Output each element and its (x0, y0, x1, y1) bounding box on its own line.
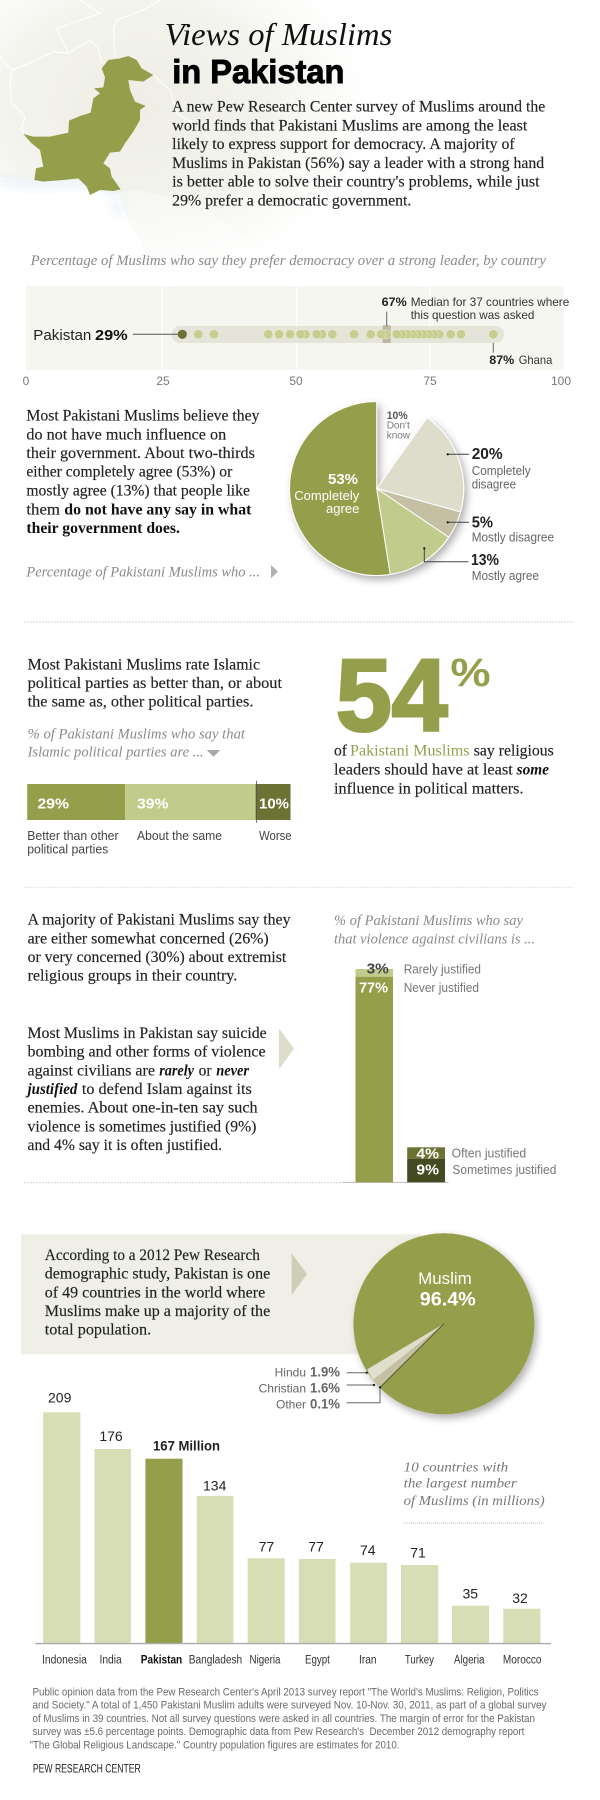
text: concern about extremist groups: or very concerned (30%) about extremist (28, 949, 287, 966)
bar chart: violence justified: 4% (416, 1146, 439, 1162)
footnote: survey was ±5.6 percentage points. Demographic data from Pew Research's December 2012 demography report (32, 1726, 524, 1738)
arrow: points to violence chart (279, 1028, 294, 1069)
bar chart: countries with largest Muslim population: India (100, 1654, 122, 1666)
text: influence on government: Most Pakistani Muslims believe they (26, 408, 260, 425)
bar chart: violence justified: Sometimes justified (452, 1163, 556, 1177)
text: religious leaders (334, 743, 554, 797)
pie chart: influence on government: know (387, 431, 411, 442)
panel: demographic study (21, 1234, 421, 1354)
pie chart: influence on government: 5% (472, 515, 493, 532)
bar chart: violence justified: Rarely justified (404, 962, 481, 976)
big statistic: 54%: % (450, 651, 491, 695)
chart caption with arrow: Percentage of Pakistani Muslims who ... (25, 565, 260, 581)
text: influence on government (26, 408, 260, 537)
bar chart: countries with largest Muslim population: 74 (360, 1542, 376, 1558)
footnote: Public opinion data from the Pew Research Center's April 2013 survey report "The World's Muslims: Religion, Politics (32, 1687, 539, 1699)
bar chart: violence justified: 77% (359, 980, 388, 996)
stacked bar: Islamic parties rating: 29% (38, 796, 69, 812)
intro text: Muslims in Pakistan (56%) say a leader with a strong hand (172, 155, 544, 172)
bar chart: countries with largest Muslim population: Nigeria (250, 1654, 281, 1666)
bar chart: countries with largest Muslim population: 32 (512, 1590, 528, 1606)
chart caption: violence against civilians: % of Pakistani Muslims who say (334, 913, 524, 929)
dot chart: democracy preference by country: 87% (489, 353, 515, 367)
stacked bar: Islamic parties rating: Worse (259, 829, 292, 843)
chart caption: 10 countries (404, 1461, 545, 1509)
pie chart: influence on government: agree (326, 501, 359, 516)
text: suicide bombing: Most Muslims in Pakistan say suicide (28, 1025, 267, 1042)
text: suicide bombing: violence is sometimes justified (9%) (28, 1118, 256, 1135)
pie chart: influence on government: Mostly disagree (472, 531, 554, 545)
source credit: PEW RESEARCH CENTER (33, 1764, 141, 1776)
bar chart: countries with largest Muslim population: 77 (259, 1539, 274, 1555)
text: religious leaders: influence in political matters. (334, 780, 524, 797)
chart caption with down arrow: Islamic political parties are ... (27, 745, 204, 761)
bar chart: violence justified: Often justified (452, 1147, 526, 1161)
chart caption with down arrow (27, 727, 246, 761)
chart caption: 10 countries: the largest number (404, 1477, 517, 1492)
text: suicide bombing: against civilians are (28, 1062, 155, 1079)
intro text: world finds that Pakistani Muslims are among the least (172, 117, 528, 134)
stacked bar: Islamic parties rating: Better than other (27, 829, 119, 843)
pie chart: religious population (259, 1233, 534, 1414)
text: concern about extremist groups (28, 911, 291, 985)
title: in Pakistan (172, 53, 344, 90)
pie chart: religious population: Hindu (275, 1366, 306, 1380)
text: suicide bombing: enemies. About one-in-ten say such (28, 1100, 258, 1117)
footnote: "The Global Religious Landscape." Country population figures are estimates for 2010. (30, 1739, 400, 1751)
text: influence on government: do not have any say in what (64, 501, 252, 518)
stacked bar: Islamic parties rating: political parties (27, 842, 108, 856)
text: religious leaders: of (334, 743, 348, 760)
text: influence on government: mostly agree (13%) that people like (26, 482, 250, 499)
text: influence on government: do not have much influence on (26, 426, 226, 443)
pie chart: religious population: Christian (259, 1382, 306, 1396)
bar chart: violence justified: Never justified (404, 981, 479, 995)
pie chart: influence on government: Mostly agree (472, 569, 539, 583)
text: Islamic political parties (28, 656, 283, 711)
text: suicide bombing: or (199, 1062, 212, 1079)
footnote (30, 1687, 547, 1751)
text: influence on government: either completely agree (53%) or (26, 464, 233, 481)
pie chart: influence on government: 13% (471, 552, 499, 569)
chart caption: violence against civilians (334, 913, 535, 947)
bar chart: countries with largest Muslim population: 134 (203, 1478, 227, 1494)
stacked bar: Islamic parties rating: 39% (137, 796, 169, 812)
panel: demographic study: demographic study, Pakistan is one (45, 1266, 270, 1283)
dot chart: democracy preference by country: Median for 37 countries where (411, 295, 570, 309)
title: Views of Muslims (165, 16, 392, 52)
intro text: 29% prefer a democratic government. (172, 192, 411, 209)
dot chart: democracy preference by country: Ghana (519, 353, 553, 367)
bar chart: countries with largest Muslim population: Turkey (405, 1654, 434, 1666)
dot chart: democracy preference by country: 0 (23, 374, 30, 388)
footnote: and Society." A total of 1,450 Pakistani Muslim adults were surveyed Nov. 10-Nov. 30, 2011, as part of a global survey (32, 1700, 547, 1712)
text: suicide bombing: to defend Islam against its (82, 1081, 252, 1098)
intro text: A new Pew Research Center survey of Muslims around the (172, 99, 545, 116)
footnote: of Muslims in 39 countries. Not all survey questions were asked in all countries. The margin of error for the Pakistan (32, 1713, 535, 1725)
panel: demographic study: According to a 2012 Pew Research (45, 1247, 260, 1264)
text: religious leaders: say religious (474, 743, 554, 760)
panel: demographic study: Muslims make up a majority of the (45, 1303, 270, 1320)
bar chart: countries with largest Muslim population: 77 (308, 1539, 324, 1555)
text: concern about extremist groups: A majority of Pakistani Muslims say they (28, 911, 291, 928)
map of Pakistan (23, 56, 153, 195)
dot chart: democracy preference by country: 29% (95, 327, 128, 344)
pie chart: influence on government: 10% (387, 410, 408, 422)
text: religious leaders: leaders should have at least (334, 761, 514, 778)
text: Islamic political parties: Most Pakistani Muslims rate Islamic (28, 656, 260, 673)
text: suicide bombing (25, 1025, 267, 1154)
pie chart: religious population: Other (276, 1397, 306, 1411)
text: influence on government: their government. About two-thirds (26, 445, 255, 462)
text: influence on government: them (26, 501, 60, 518)
pie chart: religious population: 1.9% (310, 1364, 341, 1380)
text: suicide bombing: bombing and other forms of violence (28, 1044, 266, 1061)
text: suicide bombing: never (216, 1062, 250, 1079)
intro text: likely to express support for democracy. A majority of (172, 136, 516, 153)
pie chart: religious population: Muslim (418, 1269, 472, 1288)
bar chart: countries with largest Muslim population: 209 (48, 1390, 72, 1406)
text: Islamic political parties: the same as, other political parties. (28, 694, 253, 711)
text: suicide bombing: rarely (159, 1062, 194, 1079)
text: religious leaders: some (516, 761, 549, 778)
pie chart: influence on government: disagree (472, 477, 516, 491)
pie chart: religious population: 0.1% (310, 1395, 341, 1411)
bar chart: countries with largest Muslim population: Egypt (305, 1654, 331, 1666)
dot chart: democracy preference by country: 67% (382, 295, 407, 309)
text: Islamic political parties: political parties as better than, or about (28, 675, 283, 692)
bar chart: countries with largest Muslim population: Pakistan (141, 1654, 182, 1666)
title (165, 16, 392, 90)
bar chart: countries with largest Muslim population: Indonesia (42, 1654, 87, 1666)
text: suicide bombing: and 4% say it is often justified. (28, 1137, 222, 1154)
panel: demographic study: of 49 countries in the world where (45, 1284, 265, 1301)
text: religious leaders: Pakistani Muslims (350, 743, 470, 760)
pie chart: religious population: 1.6% (310, 1380, 341, 1396)
text: influence on government: their government does. (26, 520, 180, 537)
dot chart: democracy preference by country: 100 (551, 374, 571, 388)
chart caption: 10 countries: of Muslims (in millions) (404, 1494, 545, 1509)
panel: demographic study: total population. (45, 1322, 151, 1339)
chart caption with down arrow: % of Pakistani Muslims who say that (28, 727, 246, 743)
bar chart: countries with largest Muslim population: Iran (359, 1654, 377, 1666)
bar chart: violence justified (24, 961, 556, 1183)
dot chart: democracy preference by country: Pakistan (33, 327, 91, 344)
intro text: is better able to solve their country's problems, while just (172, 174, 540, 191)
dot chart: democracy preference by country (23, 286, 571, 388)
dot chart: democracy preference by country: 75 (423, 374, 437, 388)
chart caption: 10 countries: 10 countries with (404, 1461, 508, 1476)
bar chart: countries with largest Muslim population: Algeria (454, 1654, 485, 1666)
bar chart: countries with largest Muslim population: 35 (463, 1586, 478, 1602)
bar chart: countries with largest Muslim population (35, 1390, 551, 1666)
pie chart: influence on government: Completely (472, 464, 531, 478)
bar chart: countries with largest Muslim population: 176 (99, 1428, 123, 1444)
pie chart: influence on government: Don't (387, 420, 410, 431)
dot chart: democracy preference by country: 25 (156, 374, 170, 388)
text: concern about extremist groups: are either somewhat concerned (26%) (28, 930, 269, 947)
bar chart: countries with largest Muslim population: Morocco (503, 1654, 542, 1666)
heading: democracy chart: Percentage of Muslims who say they prefer democracy over a strong leader, by country (30, 253, 547, 269)
bar chart: countries with largest Muslim population: Bangladesh (189, 1654, 242, 1666)
text: suicide bombing: justified (25, 1081, 78, 1098)
bar chart: countries with largest Muslim population: 71 (410, 1544, 426, 1560)
pie chart: influence on government: 20% (472, 446, 503, 463)
big statistic: 54%: 54 (336, 638, 448, 752)
bar chart: countries with largest Muslim population: 167 Million (153, 1438, 220, 1453)
intro text (172, 99, 545, 209)
bar chart: violence justified: 9% (416, 1163, 439, 1179)
stacked bar: Islamic parties rating: About the same (137, 829, 222, 843)
pie chart: influence on government (290, 401, 554, 583)
map background (0, 0, 600, 300)
pie chart: religious population: 96.4% (420, 1289, 476, 1311)
dot chart: democracy preference by country: this question was asked (411, 308, 534, 322)
chart caption: violence against civilians: that violence against civilians is ... (334, 931, 535, 947)
text: concern about extremist groups: religious groups in their country. (28, 968, 237, 985)
stacked bar: Islamic parties rating (27, 781, 292, 856)
bar chart: violence justified: 3% (367, 961, 389, 977)
stacked bar: Islamic parties rating: 10% (259, 796, 289, 812)
pie chart: influence on government: Completely (294, 488, 360, 503)
pie chart: influence on government: 53% (328, 472, 358, 488)
dot chart: democracy preference by country: 50 (289, 374, 303, 388)
